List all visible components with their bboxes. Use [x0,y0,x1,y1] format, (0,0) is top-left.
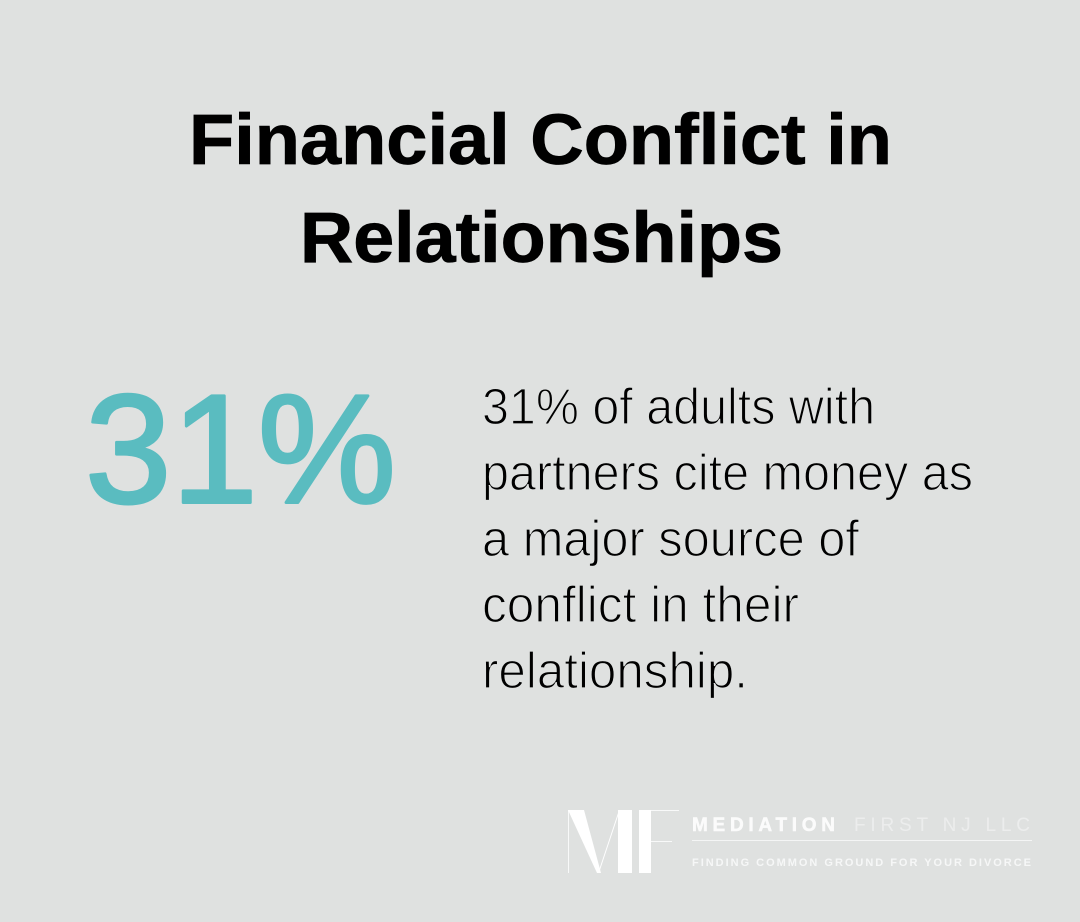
description text: conflict in their [482,576,799,633]
big statistic: 31%: 31% [85,362,396,536]
description text [482,378,973,699]
title: Relationships [300,199,783,278]
logo name: MEDIATION [692,815,835,836]
logo tagline: FINDING COMMON GROUND FOR YOUR DIVORCE [692,857,1031,869]
description text: relationship. [482,642,748,699]
logo mark: MF monogram [568,810,679,873]
logo name: FIRST NJ LLC [854,815,1030,836]
logo divider [692,840,1032,841]
title: Financial Conflict in [189,101,892,180]
logo name [692,815,1030,836]
logo: Mediation First NJ LLC [568,810,1032,873]
description text: a major source of [482,510,860,567]
description text: 31% of adults with [482,378,875,435]
description text: partners cite money as [482,444,973,501]
title [189,101,892,278]
